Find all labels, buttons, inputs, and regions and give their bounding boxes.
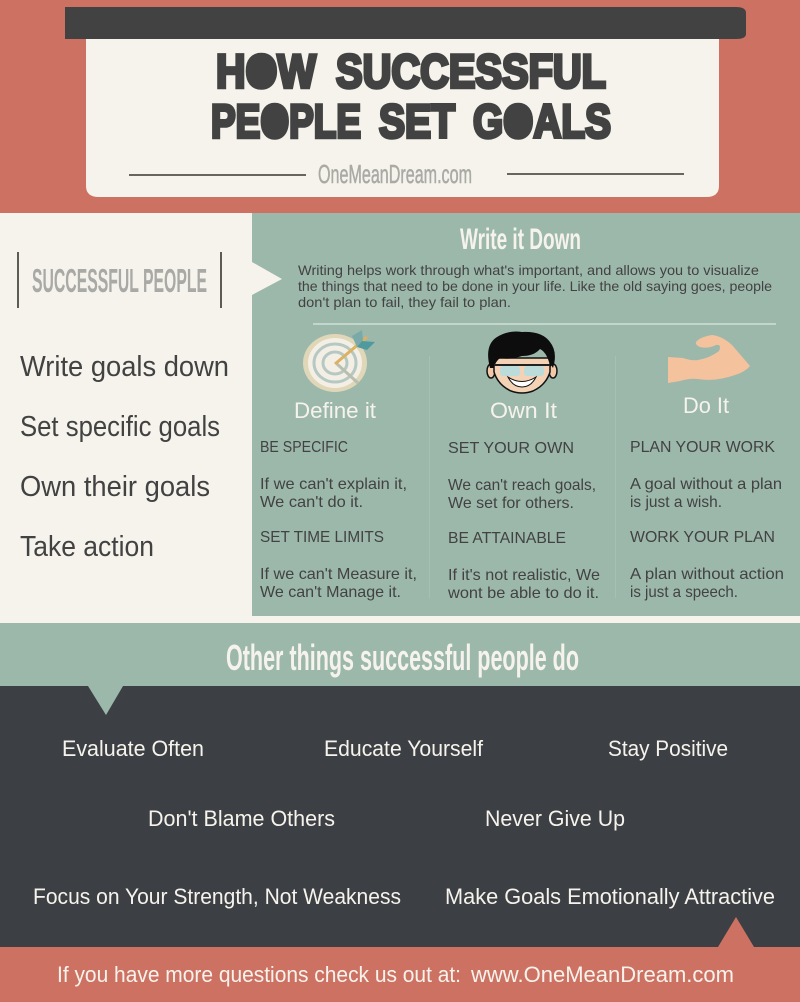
title [211, 44, 611, 148]
text block: If we can't explain it, [260, 476, 407, 493]
dark top bar [65, 7, 746, 39]
heading: Do It [683, 393, 729, 418]
text block: PLAN YOUR WORK [630, 439, 775, 456]
text block: We can't reach goals, [448, 477, 596, 494]
description: don't plan to fail, they fail to plan. [298, 294, 511, 310]
text block: We can't Manage it. [260, 584, 401, 601]
pointer down [88, 686, 123, 715]
title: SET [379, 94, 455, 148]
pointer up [718, 917, 754, 947]
title: HOW [216, 44, 317, 98]
list of habits: Take action [20, 531, 154, 563]
heading: Define it [294, 398, 376, 423]
title: SUCCESSFUL [336, 44, 606, 98]
footer text [57, 962, 734, 987]
column: do it [630, 335, 784, 601]
list items: Focus on Your Strength, Not Weakness [33, 884, 401, 909]
description [298, 262, 772, 310]
panel: other things band [0, 623, 800, 686]
text block [447, 440, 600, 602]
list items: Make Goals Emotionally Attractive [445, 884, 775, 909]
description: Writing helps work through what's important, and allows you to visualize [298, 262, 759, 278]
text block: wont be able to do it. [447, 585, 599, 602]
icon: smiling face with glasses [487, 332, 557, 393]
text block: is just a speech. [630, 584, 738, 601]
panel: other things list [0, 686, 800, 947]
heading: Own It [490, 398, 557, 423]
column: own it [447, 332, 600, 602]
paper card [86, 30, 719, 197]
website line: OneMeanDream.com [318, 159, 472, 189]
list items: Stay Positive [608, 736, 728, 761]
list items [33, 736, 775, 909]
description: the things that need to be done in your life. Like the old saying goes, people [298, 278, 772, 294]
text block: If it's not realistic, We [448, 567, 600, 584]
text block: We set for others. [448, 495, 574, 512]
panel: write it down [252, 213, 800, 616]
icon: flexed arm [668, 335, 750, 383]
list items: Evaluate Often [62, 736, 204, 761]
list items: Don't Blame Others [148, 806, 335, 831]
title: PEOPLE [211, 94, 361, 148]
panel: successful people list [17, 252, 229, 563]
footer text: If you have more questions check us out at: [57, 962, 461, 987]
list of habits: Set specific goals [20, 411, 220, 443]
list of habits [20, 351, 229, 563]
list items: Never Give Up [485, 806, 625, 831]
label: successful people: SUCCESSFUL PEOPLE [32, 262, 207, 299]
list items: Educate Yourself [324, 736, 484, 761]
text block: BE SPECIFIC [260, 439, 348, 456]
list of habits: Write goals down [20, 351, 229, 383]
text block: If we can't Measure it, [260, 566, 417, 583]
text block [260, 439, 417, 601]
list of habits: Own their goals [20, 471, 210, 503]
heading: Write it Down [460, 223, 581, 256]
title: GOALS [473, 94, 611, 148]
text block: BE ATTAINABLE [448, 530, 566, 547]
text block: A goal without a plan [630, 476, 782, 493]
icon: target with arrow [303, 330, 375, 392]
panel: header [0, 0, 800, 213]
footer text: www.OneMeanDream.com [470, 962, 734, 987]
text block: SET YOUR OWN [448, 440, 574, 457]
text block: is just a wish. [630, 494, 722, 511]
column: define it [260, 330, 417, 601]
text block: WORK YOUR PLAN [630, 529, 775, 546]
text block [630, 439, 784, 601]
text block: We can't do it. [260, 494, 363, 511]
pointer arrow [252, 262, 282, 295]
heading: Other things successful people do [226, 637, 579, 678]
text block: SET TIME LIMITS [260, 529, 384, 546]
text block: A plan without action [630, 566, 784, 583]
panel: footer [0, 917, 800, 1002]
